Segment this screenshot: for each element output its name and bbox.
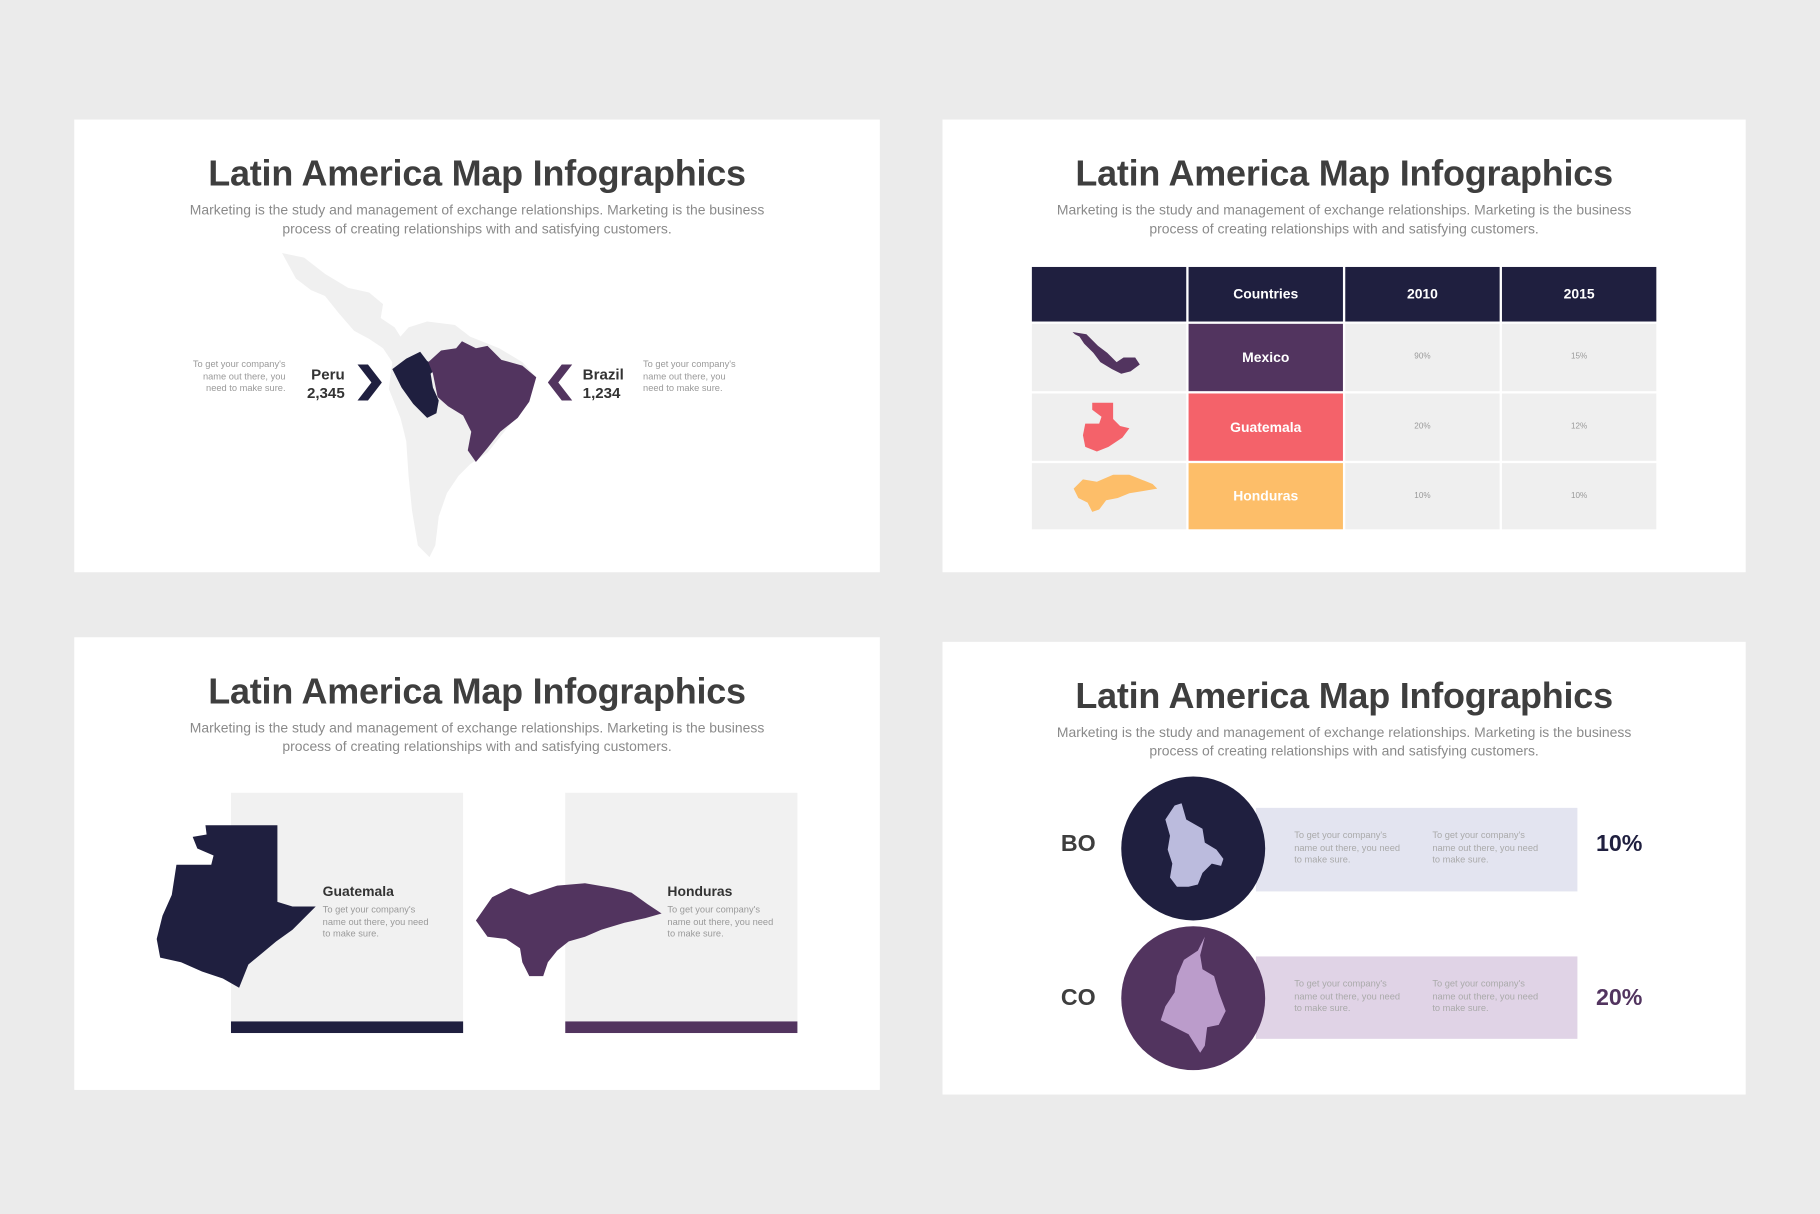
label: BO: BO — [1061, 831, 1096, 857]
row: Guatemala: 20% — [1414, 422, 1431, 431]
title: Latin America Map Infographics — [208, 153, 746, 194]
panel: table — [942, 120, 1746, 572]
subtitle — [190, 202, 764, 236]
row: BO: To get your company's name out there, you need to make sure. — [1294, 830, 1400, 865]
table header: 2015 — [1564, 286, 1595, 302]
arrow: peru chevron — [358, 364, 382, 400]
label: Peru value: Peru — [311, 366, 345, 383]
label: honduras: Honduras — [667, 883, 732, 900]
label: Brazil value: Brazil — [583, 366, 624, 383]
text: peru description: To get your company's name out there, you need to make sure. — [193, 359, 286, 393]
row: CO: To get your company's name out there, you need to make sure. — [1432, 978, 1538, 1013]
subtitle: process of creating relationships with and satisfying customers. — [1149, 742, 1539, 759]
row: Mexico: Mexico — [1242, 349, 1289, 366]
panel: map with Peru and Brazil — [74, 120, 880, 572]
row: Honduras: Honduras — [1233, 487, 1298, 504]
row: Guatemala: Guatemala — [1230, 419, 1301, 435]
brazil — [428, 341, 536, 462]
circle: CO — [1121, 926, 1265, 1070]
table header — [1032, 266, 1656, 322]
label: Brazil value: 1,234 — [583, 384, 620, 402]
row: Honduras: 10% — [1571, 492, 1587, 500]
icon: honduras — [1074, 474, 1158, 512]
subtitle: Marketing is the study and management of exchange relationships. Marketing is the business — [190, 202, 764, 218]
text: brazil description: To get your company's name out there, you need to make sure. — [643, 359, 736, 393]
value: 20%: 20% — [1596, 985, 1642, 1011]
subtitle: Marketing is the study and management of exchange relationships. Marketing is the business — [1057, 202, 1631, 218]
icon: bolivia — [1165, 803, 1224, 887]
peru — [392, 352, 439, 418]
label: Peru value — [307, 366, 345, 402]
row: Mexico: 90% — [1414, 353, 1431, 361]
shape: honduras — [476, 883, 662, 976]
subtitle — [1057, 724, 1631, 759]
subtitle: Marketing is the study and management of exchange relationships. Marketing is the business — [190, 720, 764, 736]
card: honduras: To get your company's name out there, you need to make sure. — [667, 904, 773, 939]
row: Honduras — [1032, 463, 1656, 530]
subtitle: Marketing is the study and management of exchange relationships. Marketing is the business — [1057, 724, 1631, 741]
icon: colombia — [1160, 937, 1226, 1053]
row: Guatemala: 12% — [1571, 422, 1587, 431]
subtitle: process of creating relationships with and satisfying customers. — [1149, 220, 1539, 236]
row: Mexico — [1032, 324, 1656, 392]
circle: BO — [1121, 777, 1265, 920]
subtitle: process of creating relationships with and satisfying customers. — [282, 738, 672, 754]
title: Latin America Map Infographics — [1075, 676, 1613, 716]
table header: Countries — [1233, 286, 1298, 302]
bar: BO — [1256, 808, 1577, 891]
subtitle: process of creating relationships with and satisfying customers. — [282, 220, 672, 236]
value: 10%: 10% — [1596, 831, 1642, 857]
row: BO: To get your company's name out there, you need to make sure. — [1432, 830, 1538, 865]
card: guatemala: To get your company's name out there, you need to make sure. — [323, 904, 429, 939]
label: Peru value: 2,345 — [307, 384, 345, 402]
subtitle — [1057, 202, 1631, 236]
map: latin america — [282, 253, 536, 557]
subtitle — [190, 720, 764, 754]
card: guatemala — [230, 793, 464, 1034]
title: Latin America Map Infographics — [1075, 153, 1613, 194]
icon: guatemala — [1082, 402, 1130, 452]
shape: guatemala — [156, 825, 316, 988]
label: Brazil value — [583, 366, 624, 402]
row: BO — [1061, 776, 1642, 920]
label: guatemala: Guatemala — [323, 883, 394, 900]
row: CO — [1061, 926, 1642, 1070]
label: CO: CO — [1061, 985, 1096, 1011]
table — [1032, 266, 1656, 530]
panel: Guatemala and Honduras — [74, 637, 880, 1090]
arrow: brazil chevron — [548, 364, 572, 400]
icon: mexico — [1072, 332, 1140, 374]
table header: 2010 — [1407, 286, 1438, 302]
panel: Bolivia and Colombia — [942, 642, 1746, 1095]
bar: CO — [1256, 956, 1577, 1039]
row: CO: To get your company's name out there, you need to make sure. — [1294, 978, 1400, 1013]
title: Latin America Map Infographics — [208, 671, 746, 712]
row: Honduras: 10% — [1414, 492, 1431, 500]
card: honduras — [565, 793, 798, 1034]
row: Guatemala — [1032, 394, 1656, 461]
row: Mexico: 15% — [1571, 353, 1587, 361]
